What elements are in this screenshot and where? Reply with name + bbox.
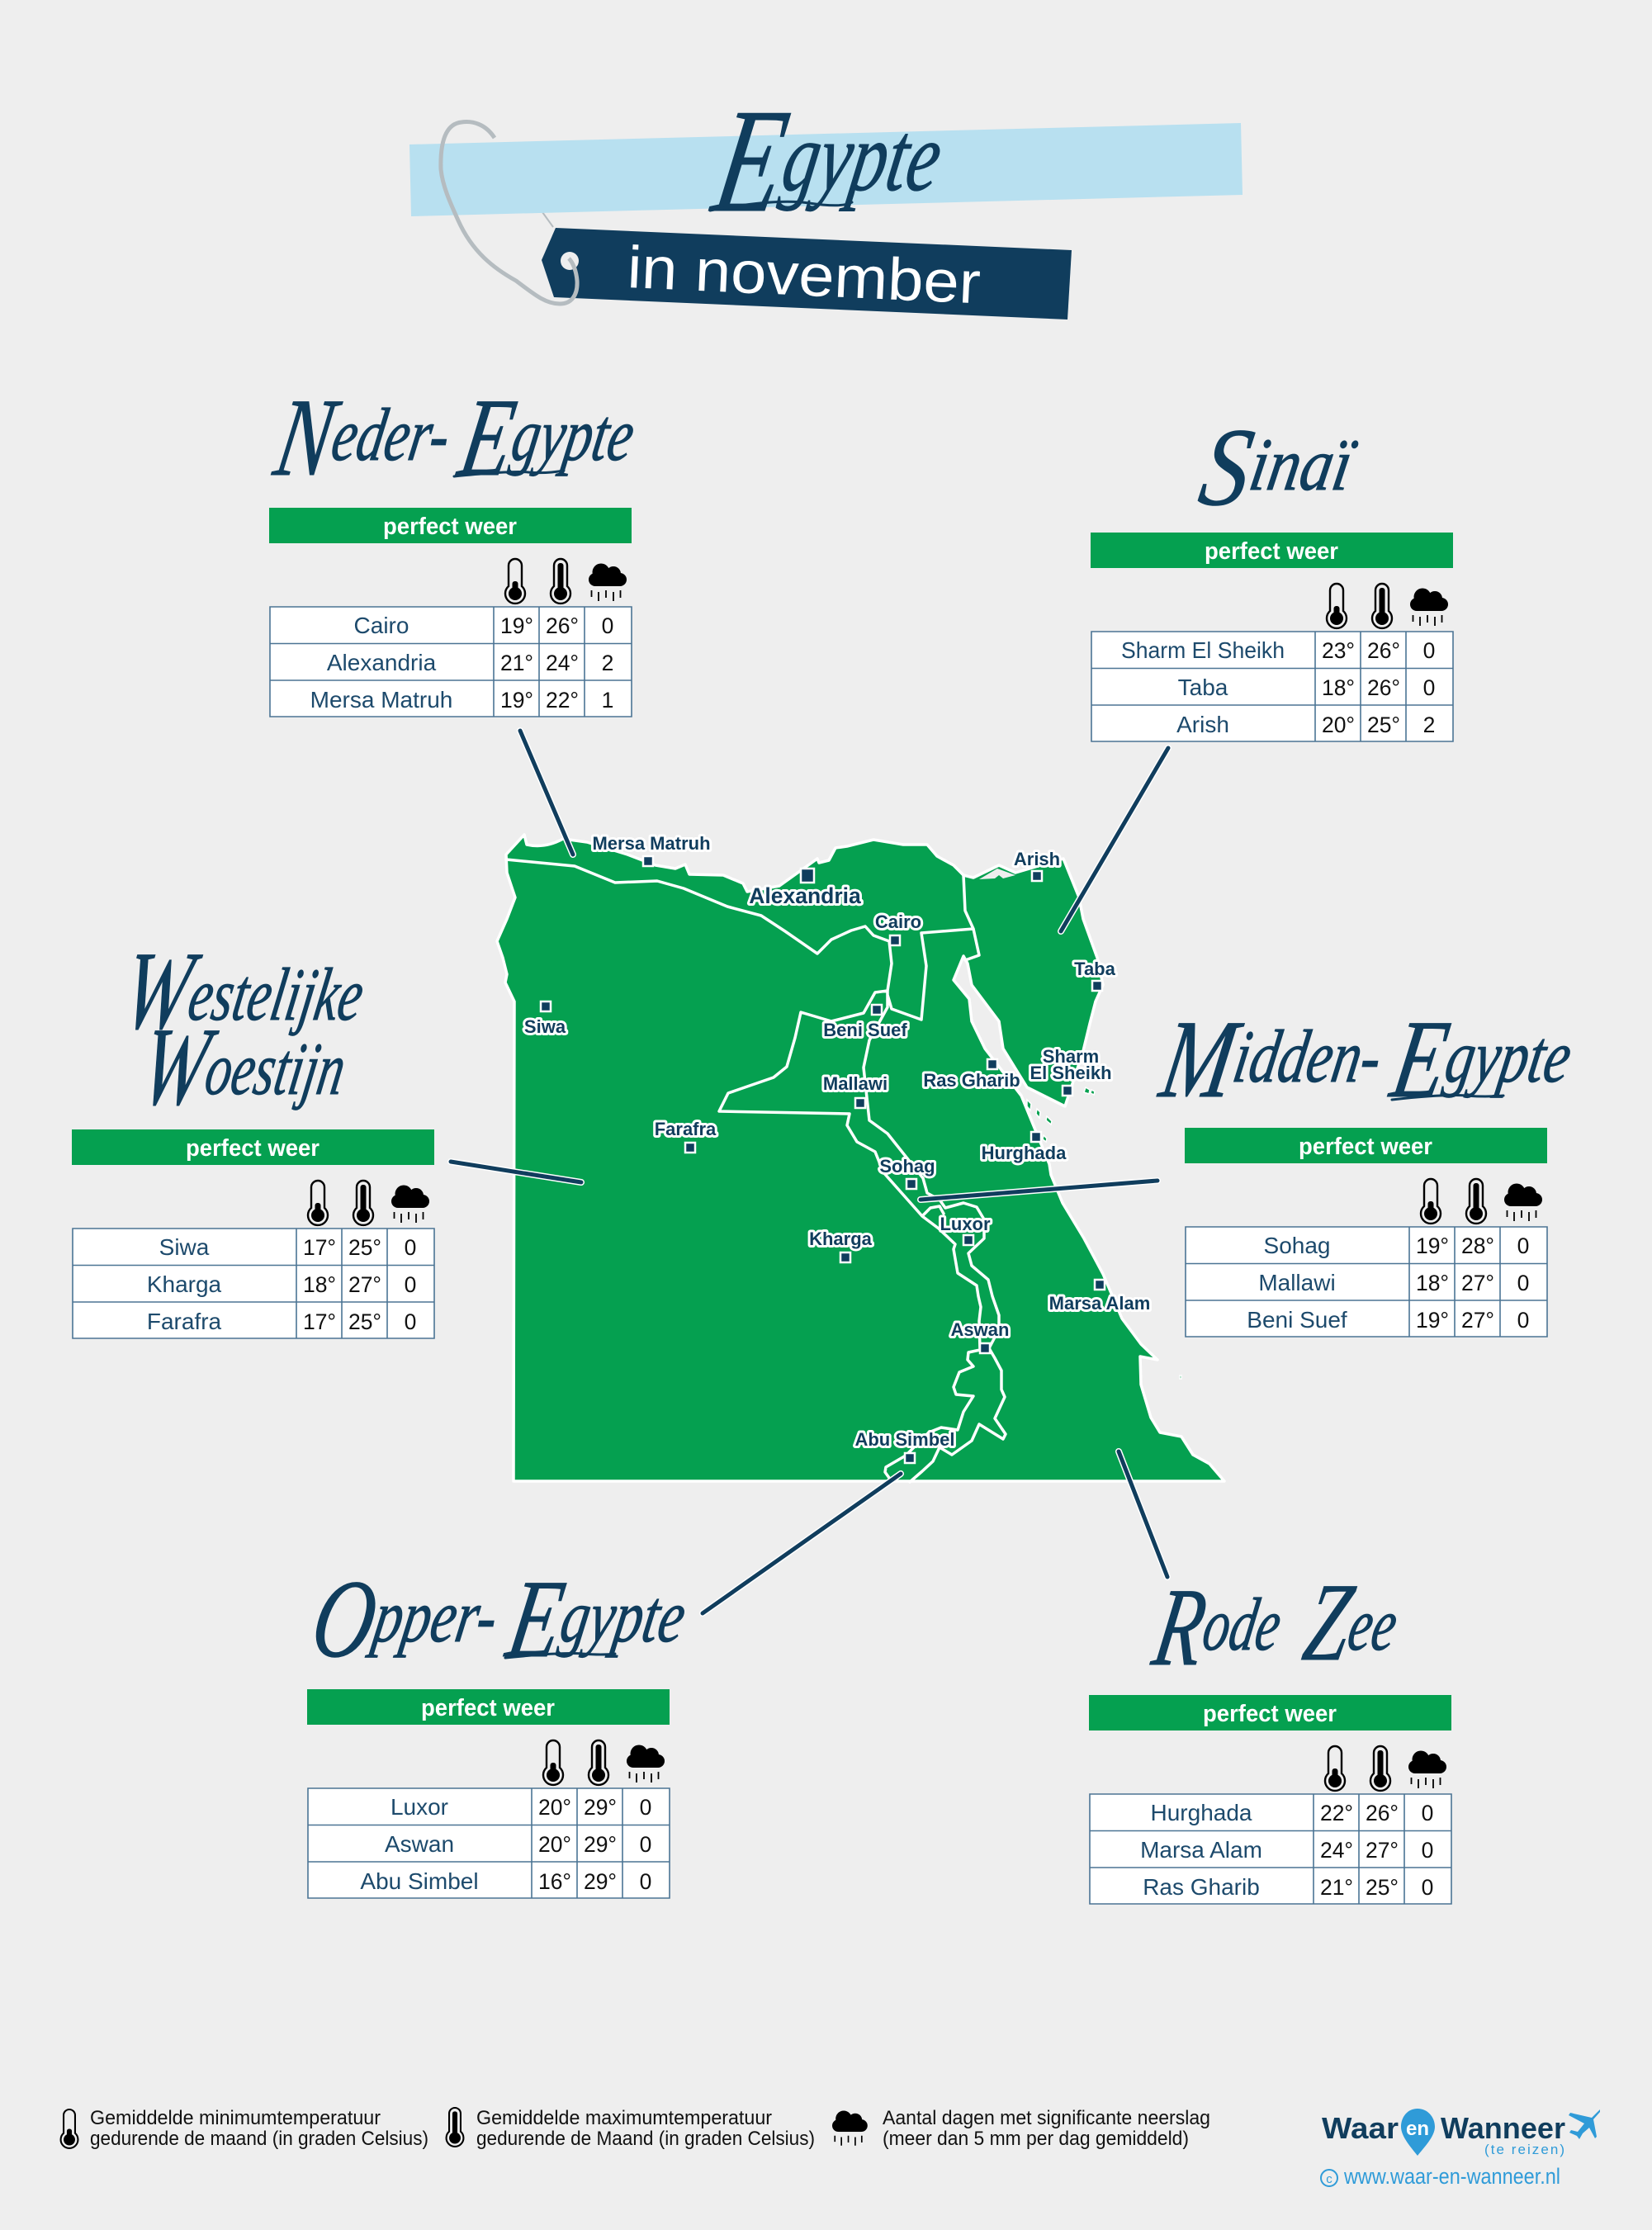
panel: Westelijke Woestijn <box>72 1129 434 1338</box>
table: 17° <box>303 1235 336 1260</box>
city: Farafra: Farafra <box>655 1119 717 1139</box>
table: 22° <box>1320 1801 1353 1825</box>
table: 27° <box>348 1272 381 1297</box>
city: Mallawi <box>823 1073 888 1108</box>
legend icon: rain <box>832 2110 868 2146</box>
city: Ras Gharib: Ras Gharib <box>923 1070 1020 1091</box>
table: 0 <box>640 1832 651 1857</box>
legend text: maximum temperature: gedurende de Maand (in graden Celsius) <box>476 2128 815 2150</box>
city: Beni Suef: Beni Suef <box>823 1020 907 1040</box>
heading: Neder-Egypte: eder- <box>326 393 471 476</box>
title swash <box>710 201 852 211</box>
table: Sharm El Sheikh <box>1121 637 1285 663</box>
heading: Neder-Egypte <box>267 376 644 500</box>
legend text: rain: Aantal dagen met significante neerslag <box>883 2107 1210 2129</box>
city: Kharga: Kharga <box>809 1229 873 1249</box>
city: Sharm El Sheikh: Sharm <box>1043 1046 1099 1067</box>
legend text: minimum temperature <box>90 2107 428 2150</box>
status bar <box>1089 1695 1451 1730</box>
table: 27° <box>1461 1271 1494 1295</box>
table: 19° <box>500 688 533 713</box>
panel: Opper-Egypte <box>307 1689 670 1898</box>
table <box>308 1788 670 1898</box>
legend text: maximum temperature <box>476 2107 815 2150</box>
table: 25° <box>348 1309 381 1334</box>
table: 22° <box>546 688 579 713</box>
status text: perfect weer <box>186 1135 320 1162</box>
table: Cairo <box>354 613 409 638</box>
table: 0 <box>405 1235 416 1260</box>
table: 0 <box>1517 1308 1529 1333</box>
city: Hurghada: Hurghada <box>982 1143 1067 1163</box>
city: Sharm El Sheikh <box>1030 1046 1112 1096</box>
table: Kharga <box>147 1271 222 1297</box>
city: Arish: Arish <box>1014 849 1060 869</box>
table: 21° <box>1320 1875 1353 1900</box>
city: Mersa Matruh: Mersa Matruh <box>592 833 711 854</box>
panel: Sinai <box>1091 533 1453 741</box>
tag hole <box>561 252 579 270</box>
table: 2 <box>602 651 613 675</box>
table: 24° <box>1320 1838 1353 1863</box>
heading: Midden-Egypte: idden- <box>1228 1015 1403 1098</box>
table: 17° <box>303 1309 336 1334</box>
status text: perfect weer <box>1299 1134 1432 1160</box>
city: Cairo <box>875 911 921 945</box>
leader line: Opper-Egypte <box>703 1474 901 1613</box>
city: Alexandria: Alexandria <box>749 883 861 908</box>
table: 0 <box>1423 675 1435 700</box>
city: Cairo: Cairo <box>875 911 921 932</box>
table: Hurghada <box>1151 1800 1252 1825</box>
city: Sohag <box>879 1156 935 1189</box>
city: Mallawi: Mallawi <box>823 1073 888 1094</box>
city: Marsa Alam <box>1049 1280 1150 1314</box>
heading: Rode Zee: Z <box>1296 1561 1361 1684</box>
status text: perfect weer <box>383 514 517 540</box>
city: Arish <box>1014 849 1060 881</box>
grey string loop <box>441 122 577 304</box>
status text: perfect weer <box>1205 538 1338 565</box>
logo text: Wanneer: Wanneer <box>1441 2111 1565 2145</box>
table: 0 <box>640 1795 651 1820</box>
legend icon: maximum temperature <box>447 2108 463 2147</box>
heading: Opper-Egypte: O <box>304 1558 386 1681</box>
heading: Sinai: S <box>1192 406 1261 529</box>
city: Luxor <box>940 1214 991 1245</box>
copyright icon: c <box>1326 2172 1332 2186</box>
table: Siwa <box>159 1234 210 1260</box>
city: Kharga <box>809 1229 873 1262</box>
title: Egypte: gypte <box>775 102 950 212</box>
subtitle: in november: in november <box>626 234 982 316</box>
city: Aswan: Aswan <box>951 1319 1009 1340</box>
heading: Westelijke Woestijn: W <box>115 930 208 1053</box>
status bar <box>269 508 632 543</box>
table: 0 <box>405 1272 416 1297</box>
heading: Midden-Egypte: M <box>1152 998 1249 1121</box>
legend text: rain <box>883 2107 1210 2150</box>
leader line: Rode Zee <box>1119 1451 1167 1577</box>
heading: Opper-Egypte: E <box>499 1558 572 1681</box>
table: 20° <box>538 1795 571 1820</box>
city: Aswan <box>951 1319 1009 1353</box>
table: 2 <box>1423 713 1435 737</box>
city: Hurghada <box>982 1132 1067 1163</box>
city: Taba <box>1074 959 1116 991</box>
table: 0 <box>1422 1838 1433 1863</box>
legend icon: minimum temperature <box>61 2109 78 2148</box>
table: 1 <box>602 688 613 713</box>
city: Sohag: Sohag <box>879 1156 935 1177</box>
table: 28° <box>1461 1233 1494 1258</box>
city: Taba: Taba <box>1074 959 1116 979</box>
table: Mallawi <box>1258 1270 1336 1295</box>
legend text: rain: (meer dan 5 mm per dag gemiddeld) <box>883 2128 1189 2150</box>
leader line: Midden-Egypte <box>921 1181 1157 1200</box>
heading: Neder-Egypte: gypte <box>506 393 641 476</box>
icons <box>543 1740 665 1785</box>
legend text: minimum temperature: Gemiddelde minimumtemperatuur <box>90 2107 381 2129</box>
leader line: Sinai <box>1061 748 1168 931</box>
table: 16° <box>538 1869 571 1894</box>
table: 25° <box>1366 1875 1399 1900</box>
city: Abu Simbel <box>854 1429 955 1463</box>
table: Ras Gharib <box>1143 1874 1260 1900</box>
table: 0 <box>640 1869 651 1894</box>
table: 26° <box>546 613 579 638</box>
panel: Neder-Egypte <box>269 508 632 717</box>
city: Abu Simbel: Abu Simbel <box>854 1429 955 1450</box>
table: 25° <box>348 1235 381 1260</box>
heading: Rode Zee: ee <box>1342 1583 1403 1666</box>
city: Sharm El Sheikh: El Sheikh <box>1030 1063 1112 1083</box>
table: 19° <box>1416 1308 1449 1333</box>
heading: Opper-Egypte: gypte <box>555 1574 692 1658</box>
status text: perfect weer <box>421 1695 555 1721</box>
heading: Sinai: inaï <box>1244 423 1362 506</box>
table <box>270 607 632 717</box>
panel: Rode Zee <box>1089 1695 1451 1904</box>
table: Alexandria <box>327 650 437 675</box>
table: Arish <box>1176 712 1229 737</box>
table: Farafra <box>147 1309 222 1334</box>
heading: Neder-Egypte: E <box>451 376 523 500</box>
table: 20° <box>1322 713 1355 737</box>
regional borders <box>506 859 1006 1482</box>
city: Marsa Alam: Marsa Alam <box>1049 1293 1150 1314</box>
icons <box>1421 1179 1542 1224</box>
status bar <box>1185 1128 1547 1163</box>
heading: Westelijke Woestijn: W <box>133 1006 224 1129</box>
title tag: navy <box>542 228 1072 320</box>
legend text: maximum temperature: Gemiddelde maximumtemperatuur <box>476 2107 772 2129</box>
icons <box>1327 584 1448 628</box>
heading: Opper-Egypte <box>304 1558 695 1681</box>
heading: Midden-Egypte <box>1152 998 1581 1121</box>
table: 27° <box>1366 1838 1399 1863</box>
table: 0 <box>405 1309 416 1334</box>
table: Mersa Matruh <box>310 687 452 713</box>
table: 29° <box>584 1795 617 1820</box>
table: 20° <box>538 1832 571 1857</box>
city: Alexandria <box>749 869 861 908</box>
heading: Westelijke Woestijn <box>115 930 374 1129</box>
table: 21° <box>500 651 533 675</box>
city: Luxor: Luxor <box>940 1214 991 1234</box>
Bardawil lagoon <box>979 869 1015 879</box>
table: Luxor <box>391 1794 448 1820</box>
table: 19° <box>500 613 533 638</box>
table: 23° <box>1322 638 1355 663</box>
table: 27° <box>1461 1308 1494 1333</box>
title: Egypte: E <box>702 78 798 244</box>
legend text: minimum temperature: gedurende de maand (in graden Celsius) <box>90 2128 428 2150</box>
table: Sohag <box>1264 1233 1330 1258</box>
table: 18° <box>1416 1271 1449 1295</box>
country outline <box>497 835 1224 1481</box>
city: Mersa Matruh <box>592 833 711 866</box>
table <box>1186 1227 1547 1337</box>
status bar <box>72 1129 434 1165</box>
map of Egypt <box>497 833 1224 1482</box>
heading: Midden-Egypte: gypte <box>1440 1015 1578 1098</box>
table: 29° <box>584 1869 617 1894</box>
logo plane icon <box>1569 2109 1600 2139</box>
table: Beni Suef <box>1247 1307 1347 1333</box>
city: Beni Suef <box>823 1005 907 1040</box>
heading: Westelijke Woestijn: oestijn <box>200 1027 352 1110</box>
panel: Midden-Egypte <box>1185 1128 1547 1337</box>
table: 0 <box>1423 638 1435 663</box>
heading: Rode Zee: R <box>1145 1566 1214 1689</box>
heading: Opper-Egypte: pper- <box>364 1574 518 1658</box>
table <box>73 1229 434 1338</box>
table: 26° <box>1367 638 1400 663</box>
icons <box>308 1181 429 1225</box>
legend <box>61 2107 1210 2150</box>
status bar <box>307 1689 670 1725</box>
table: 26° <box>1367 675 1400 700</box>
table <box>1091 632 1453 741</box>
status bar <box>1091 533 1453 568</box>
table: Abu Simbel <box>360 1868 479 1894</box>
city: Ras Gharib <box>923 1059 1020 1091</box>
table: Taba <box>1178 675 1228 700</box>
table: 0 <box>1517 1233 1529 1258</box>
table: 25° <box>1367 713 1400 737</box>
status text: perfect weer <box>1203 1701 1337 1727</box>
logo pin <box>1401 2109 1435 2156</box>
table: 0 <box>602 613 613 638</box>
table: 19° <box>1416 1233 1449 1258</box>
heading: Rode Zee: ode <box>1197 1583 1314 1666</box>
table: 24° <box>546 651 579 675</box>
logo <box>1321 2109 1600 2189</box>
city: Siwa: Siwa <box>524 1016 566 1037</box>
icons <box>1325 1746 1446 1791</box>
table: Aswan <box>385 1831 454 1857</box>
table: 18° <box>1322 675 1355 700</box>
title block <box>409 78 1243 320</box>
table <box>1090 1794 1451 1904</box>
heading: Westelijke Woestijn: estelijke <box>182 953 370 1036</box>
table: 18° <box>303 1272 336 1297</box>
website: www.waar-en-wanneer.nl <box>1343 2164 1560 2189</box>
table: 0 <box>1422 1875 1433 1900</box>
table: 0 <box>1517 1271 1529 1295</box>
title string (back part) <box>542 212 553 227</box>
Red Sea islands <box>1027 1087 1181 1379</box>
table: 26° <box>1366 1801 1399 1825</box>
table: Marsa Alam <box>1140 1837 1262 1863</box>
table: 29° <box>584 1832 617 1857</box>
copyright icon <box>1321 2170 1337 2186</box>
table: 0 <box>1422 1801 1433 1825</box>
city: Siwa <box>524 1001 566 1037</box>
leader line: Westelijke Woestijn <box>451 1162 581 1182</box>
logo text: Waar: Waar <box>1322 2111 1399 2145</box>
icons <box>505 559 627 604</box>
heading: Neder-Egypte: N <box>267 376 348 500</box>
title banner: light blue <box>409 123 1243 216</box>
heading: Midden-Egypte: E <box>1383 998 1457 1121</box>
city: Farafra <box>655 1119 717 1153</box>
logo text: te reizen: (te reizen) <box>1484 2142 1564 2157</box>
logo text: en: en <box>1406 2118 1429 2140</box>
leader line: Neder-Egypte <box>520 731 573 855</box>
